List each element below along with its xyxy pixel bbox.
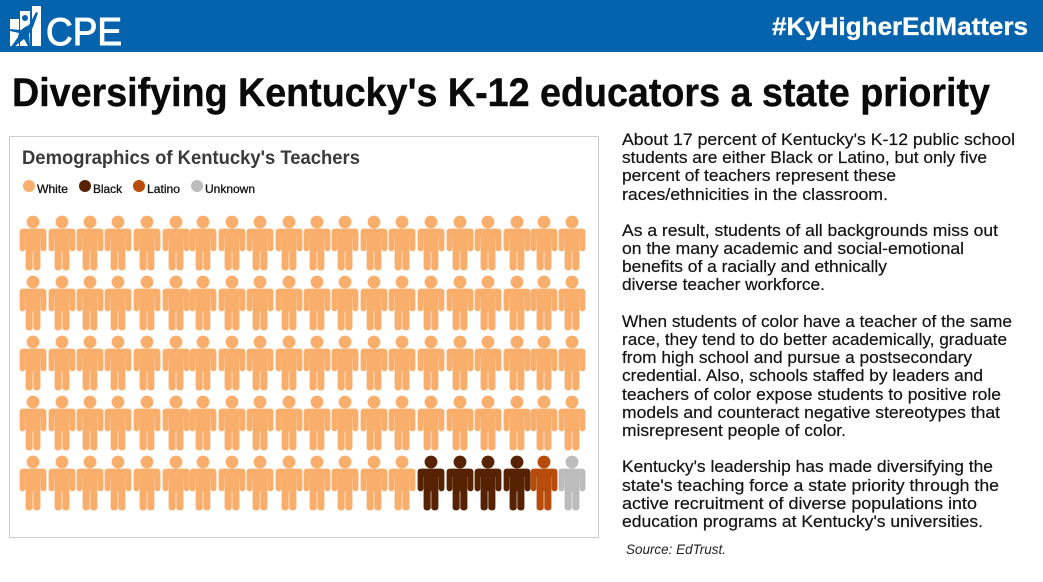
legend bbox=[23, 180, 255, 196]
text block: paragraph 3: credential. Also, schools staffed by leaders and bbox=[622, 367, 983, 385]
text block: paragraph 3: from high school and pursue a postsecondary bbox=[622, 349, 973, 367]
source note: Source: EdTrust. bbox=[626, 541, 726, 557]
header band bbox=[0, 0, 1043, 54]
text block: paragraph 3: models and counteract negative stereotypes that bbox=[622, 404, 1000, 422]
hashtag: #KyHigherEdMatters bbox=[772, 13, 1028, 41]
text block: paragraph 2 bbox=[622, 222, 998, 294]
icon: CPE logo mark bbox=[10, 6, 41, 47]
text block: paragraph 1: students are either Black or Latino, but only five bbox=[622, 149, 987, 167]
text block: paragraph 3: When students of color have a teacher of the same bbox=[622, 313, 1012, 331]
legend: White bbox=[37, 182, 68, 196]
text block: paragraph 3: misrepresent people of color. bbox=[622, 422, 846, 440]
text block: paragraph 1: percent of teachers represent these bbox=[622, 167, 896, 185]
text block: paragraph 4: state's teaching force a state priority through the bbox=[622, 477, 999, 495]
logo wordmark: CPE bbox=[46, 11, 122, 54]
text block: paragraph 2: diverse teacher workforce. bbox=[622, 276, 825, 294]
chart heading: Demographics of Kentucky's Teachers bbox=[22, 148, 360, 169]
legend: Black bbox=[93, 182, 123, 196]
text block: paragraph 2: on the many academic and social-emotional bbox=[622, 240, 964, 258]
text block: paragraph 2: As a result, students of all backgrounds miss out bbox=[622, 222, 998, 240]
text block: paragraph 3 bbox=[622, 313, 1012, 440]
pictogram: row 4 bbox=[20, 396, 585, 450]
text block: paragraph 4: active recruitment of diverse populations into bbox=[622, 495, 977, 513]
text block: paragraph 3: teachers of color expose students to positive role bbox=[622, 386, 1001, 404]
text block: paragraph 4: Kentucky's leadership has made diversifying the bbox=[622, 458, 993, 476]
text block: paragraph 3: race, they tend to do better academically, graduate bbox=[622, 331, 1007, 349]
legend: Unknown bbox=[205, 182, 255, 196]
pictogram: row 2 bbox=[20, 276, 585, 330]
text block: paragraph 1 bbox=[622, 131, 1015, 204]
pictogram: row 3 bbox=[20, 336, 585, 390]
panel: demographics chart bbox=[10, 136, 598, 538]
legend: Latino bbox=[147, 182, 180, 196]
pictogram: row 5 bbox=[20, 456, 585, 510]
text block: paragraph 4 bbox=[622, 458, 999, 531]
text block: paragraph 1: races/ethnicities in the classroom. bbox=[622, 186, 888, 204]
pictogram: row 1 bbox=[20, 216, 585, 270]
title: Diversifying Kentucky's K-12 educators a state priority bbox=[12, 71, 991, 115]
text block: paragraph 1: About 17 percent of Kentucky's K-12 public school bbox=[622, 131, 1015, 149]
text block: paragraph 2: benefits of a racially and ethnically bbox=[622, 258, 888, 276]
text block: paragraph 4: education programs at Kentucky's universities. bbox=[622, 513, 983, 531]
